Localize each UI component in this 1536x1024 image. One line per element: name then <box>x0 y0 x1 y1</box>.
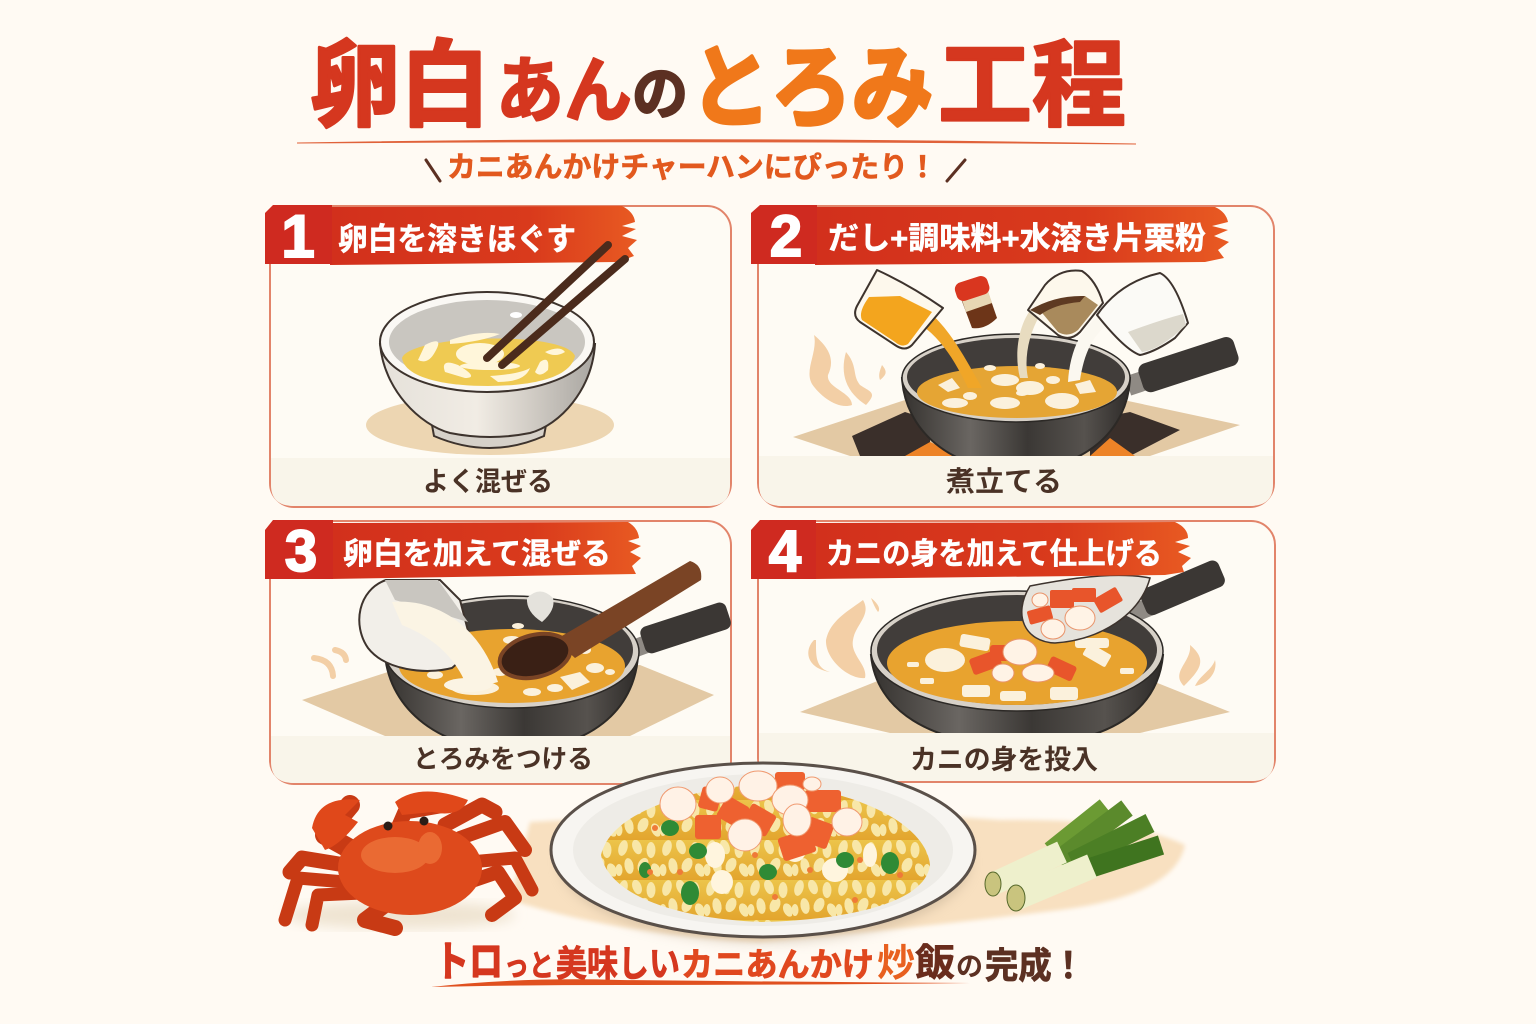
illustration: plate of crab fried rice <box>551 763 975 942</box>
icon: seasoning drop <box>527 592 554 622</box>
illustration: crab <box>285 791 532 929</box>
icon: steam right <box>1179 645 1216 686</box>
ribbon 2: 2 <box>770 204 802 269</box>
closing message: 飯 <box>915 943 955 985</box>
illustration: green onions <box>985 806 1161 911</box>
caption strip 2: 煮立てる <box>946 466 1062 497</box>
crab topping <box>660 771 862 862</box>
ribbon 2 <box>751 204 1229 269</box>
closing message: 完成！ <box>985 945 1085 986</box>
ribbon 4: 4 <box>769 519 801 584</box>
ribbon 1: 卵白を溶きほぐす <box>338 222 576 257</box>
icon: cup of starch water <box>1097 273 1188 355</box>
title: 工程 <box>938 33 1126 138</box>
ribbon 4 <box>751 519 1191 584</box>
illustration: bowl with egg whites <box>366 292 614 455</box>
background wash behind plate <box>510 813 1185 942</box>
caption strip 1 <box>271 458 730 506</box>
rice mound <box>601 784 930 922</box>
closing underline <box>431 979 970 987</box>
illustration: frying pan 2 <box>902 334 1241 470</box>
ribbon 4: カニの身を加えて仕上げる <box>826 538 1162 571</box>
ribbon 1 <box>265 203 637 270</box>
closing message: カニあんかけ <box>681 946 874 983</box>
subtitle: カニあんかけチャーハンにぴったり！ <box>447 152 937 184</box>
icon: motion marks <box>314 650 346 676</box>
icon: seasoning bottle <box>953 274 997 328</box>
illustration: frying pan 3 <box>302 596 733 750</box>
illustration: stream of broth <box>926 318 982 388</box>
icon: steam <box>809 335 886 406</box>
illustration: wooden spoon <box>495 561 701 685</box>
caption strip 3 <box>271 736 730 783</box>
caption strip 1: よく混ぜる <box>423 467 553 497</box>
ribbon 3: 3 <box>285 519 317 584</box>
panel 1: beat egg whites <box>265 203 731 507</box>
icon: measuring cup of broth <box>855 270 943 348</box>
title: とろみ <box>690 39 933 139</box>
illustration: spoon with crab meat <box>1022 575 1150 643</box>
caption strip 2 <box>759 456 1273 506</box>
illustration: stream of seasoning <box>1017 312 1038 378</box>
title underline <box>297 140 1136 144</box>
closing message: 美味しい <box>556 943 680 984</box>
caption strip 3: とろみをつける <box>413 744 593 774</box>
caption strip 4 <box>759 733 1274 781</box>
ribbon 3 <box>265 519 641 584</box>
panel 2: dashi and seasoning <box>751 204 1274 507</box>
title: の <box>632 62 688 127</box>
closing message: っと <box>504 950 554 983</box>
ribbon 3: 卵白を加えて混ぜる <box>343 538 611 571</box>
title: あん <box>496 52 632 132</box>
ribbon 2: だし+調味料+水溶き片栗粉 <box>828 221 1206 256</box>
icon: chopsticks <box>487 245 625 365</box>
illustration: stream of starch water <box>1068 340 1091 382</box>
closing message <box>435 938 1085 986</box>
ribbon 1: 1 <box>281 203 315 270</box>
illustration: stove <box>793 395 1240 456</box>
icon: cup of soy seasoning <box>1028 271 1103 338</box>
caption strip 4: カニの身を投入 <box>910 745 1098 775</box>
title: 卵白 <box>310 33 490 138</box>
closing message: トロ <box>435 938 503 985</box>
illustration: frying pan 4 <box>800 558 1230 745</box>
closing message: 炒 <box>877 943 915 985</box>
title <box>310 33 1126 139</box>
icon: steam left <box>808 598 879 678</box>
closing message: の <box>956 952 983 982</box>
panel 3: add egg whites <box>265 519 733 784</box>
panel 4: add crab meat <box>751 519 1275 782</box>
illustration: pouring bowl <box>359 580 498 692</box>
